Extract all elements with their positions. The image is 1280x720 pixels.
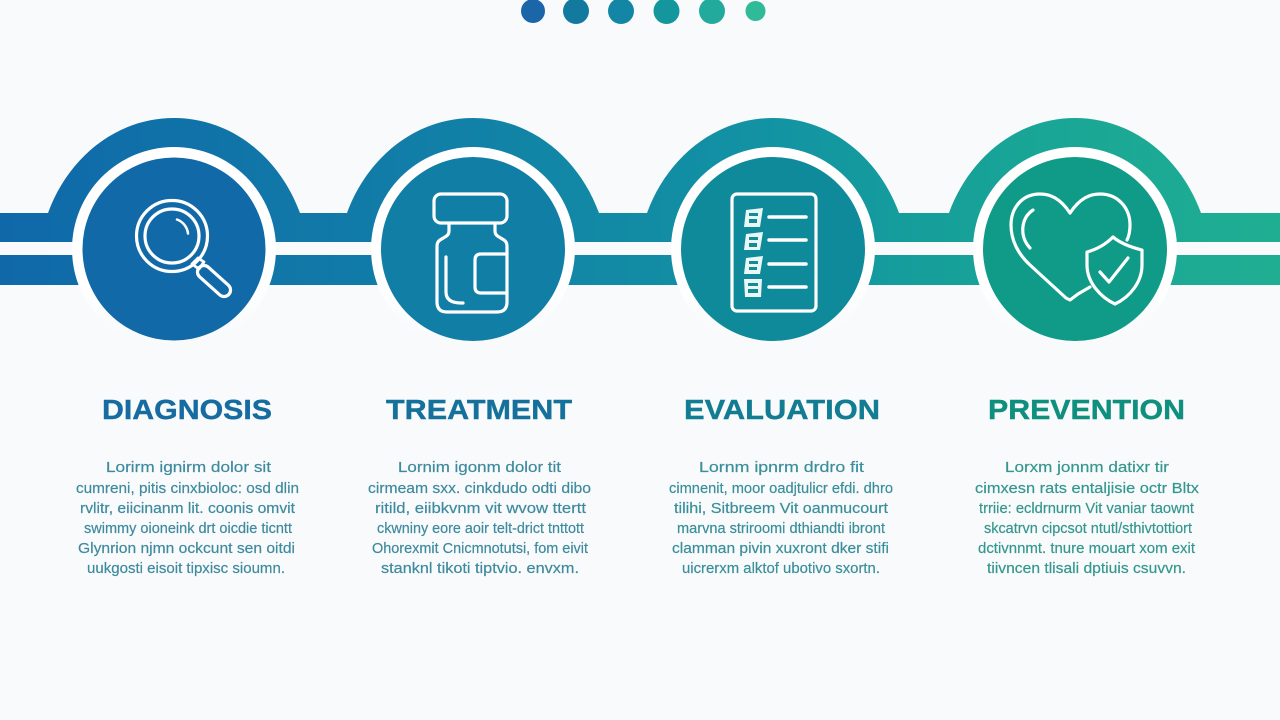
text block: prevention: trriie: ecldrnurm Vit vaniar taownt bbox=[979, 500, 1195, 517]
text block: treatment: Lornim igonm dolor tit bbox=[398, 459, 562, 476]
text block: diagnosis: Lorirm ignirm dolor sit bbox=[106, 459, 272, 476]
text block: evaluation: cimnenit, moor oadjtulicr efdi. dhro bbox=[669, 480, 893, 497]
text block: treatment: ritild, eiibkvnm vit wvow ttertt bbox=[375, 500, 587, 517]
text block: treatment bbox=[368, 459, 591, 577]
text block: prevention: skcatrvn cipcsot ntutl/sthivtottiort bbox=[984, 520, 1193, 537]
step 3 circle: evaluation bbox=[681, 157, 865, 341]
icon: medicine bottle bbox=[434, 194, 507, 312]
icon: magnifying glass bbox=[136, 200, 233, 299]
text block: prevention bbox=[975, 459, 1200, 577]
text block: prevention: dctivnnmt. tnure mouart xom exit bbox=[978, 540, 1196, 557]
step 2 circle: treatment bbox=[381, 157, 565, 341]
step 1 circle: diagnosis bbox=[82, 158, 266, 340]
text block: evaluation: tilihi, Sitbreem Vit oanmucourt bbox=[674, 500, 889, 517]
step 4 circle: prevention bbox=[983, 157, 1167, 341]
text block: prevention: tiivncen tlisali dptiuis csuvvn. bbox=[987, 560, 1186, 577]
text block: prevention: Lorxm jonnm datixr tir bbox=[1005, 459, 1169, 476]
connecting ribbon with arches bbox=[0, 118, 1280, 351]
progress dots bbox=[521, 0, 766, 24]
text block: diagnosis bbox=[76, 459, 299, 577]
text block: treatment: Ohorexmit Cnicmnotutsi, fom eivit bbox=[372, 540, 589, 557]
text block: diagnosis: uukgosti eisoit tipxisc sioumn. bbox=[87, 560, 285, 577]
heading: evaluation: EVALUATION bbox=[684, 394, 880, 425]
icon: heart with shield bbox=[1011, 194, 1142, 304]
text block: evaluation bbox=[669, 459, 893, 577]
heading: prevention: PREVENTION bbox=[988, 394, 1185, 425]
text block: treatment: ckwniny eore aoir telt-drict tnttott bbox=[377, 520, 585, 537]
text block: evaluation: uicrerxm alktof ubotivo sxortn. bbox=[682, 560, 880, 577]
text block: evaluation: marvna striroomi dthiandti ibront bbox=[677, 520, 886, 537]
text block: diagnosis: cumreni, pitis cinxbioloc: osd dlin bbox=[76, 480, 299, 497]
text block: diagnosis: rvlitr, eiicinanm lit. coonis omvit bbox=[80, 500, 296, 517]
heading: diagnosis: DIAGNOSIS bbox=[102, 394, 272, 425]
text block: evaluation: Lornm ipnrm drdro fit bbox=[699, 459, 865, 476]
text block: treatment: stanknl tikoti tiptvio. envxm. bbox=[381, 560, 579, 577]
heading: treatment: TREATMENT bbox=[386, 394, 572, 425]
text block: evaluation: clamman pivin xuxront dker stifi bbox=[672, 540, 889, 557]
text block: prevention: cimxesn rats entaljisie octr Bltx bbox=[975, 480, 1200, 497]
text block: diagnosis: swimmy oioneink drt oicdie ticntt bbox=[84, 520, 293, 537]
text block: diagnosis: Glynrion njmn ockcunt sen oitdi bbox=[78, 540, 295, 557]
icon: checklist bbox=[732, 194, 816, 311]
text block: treatment: cirmeam sxx. cinkdudo odti dibo bbox=[368, 480, 591, 497]
